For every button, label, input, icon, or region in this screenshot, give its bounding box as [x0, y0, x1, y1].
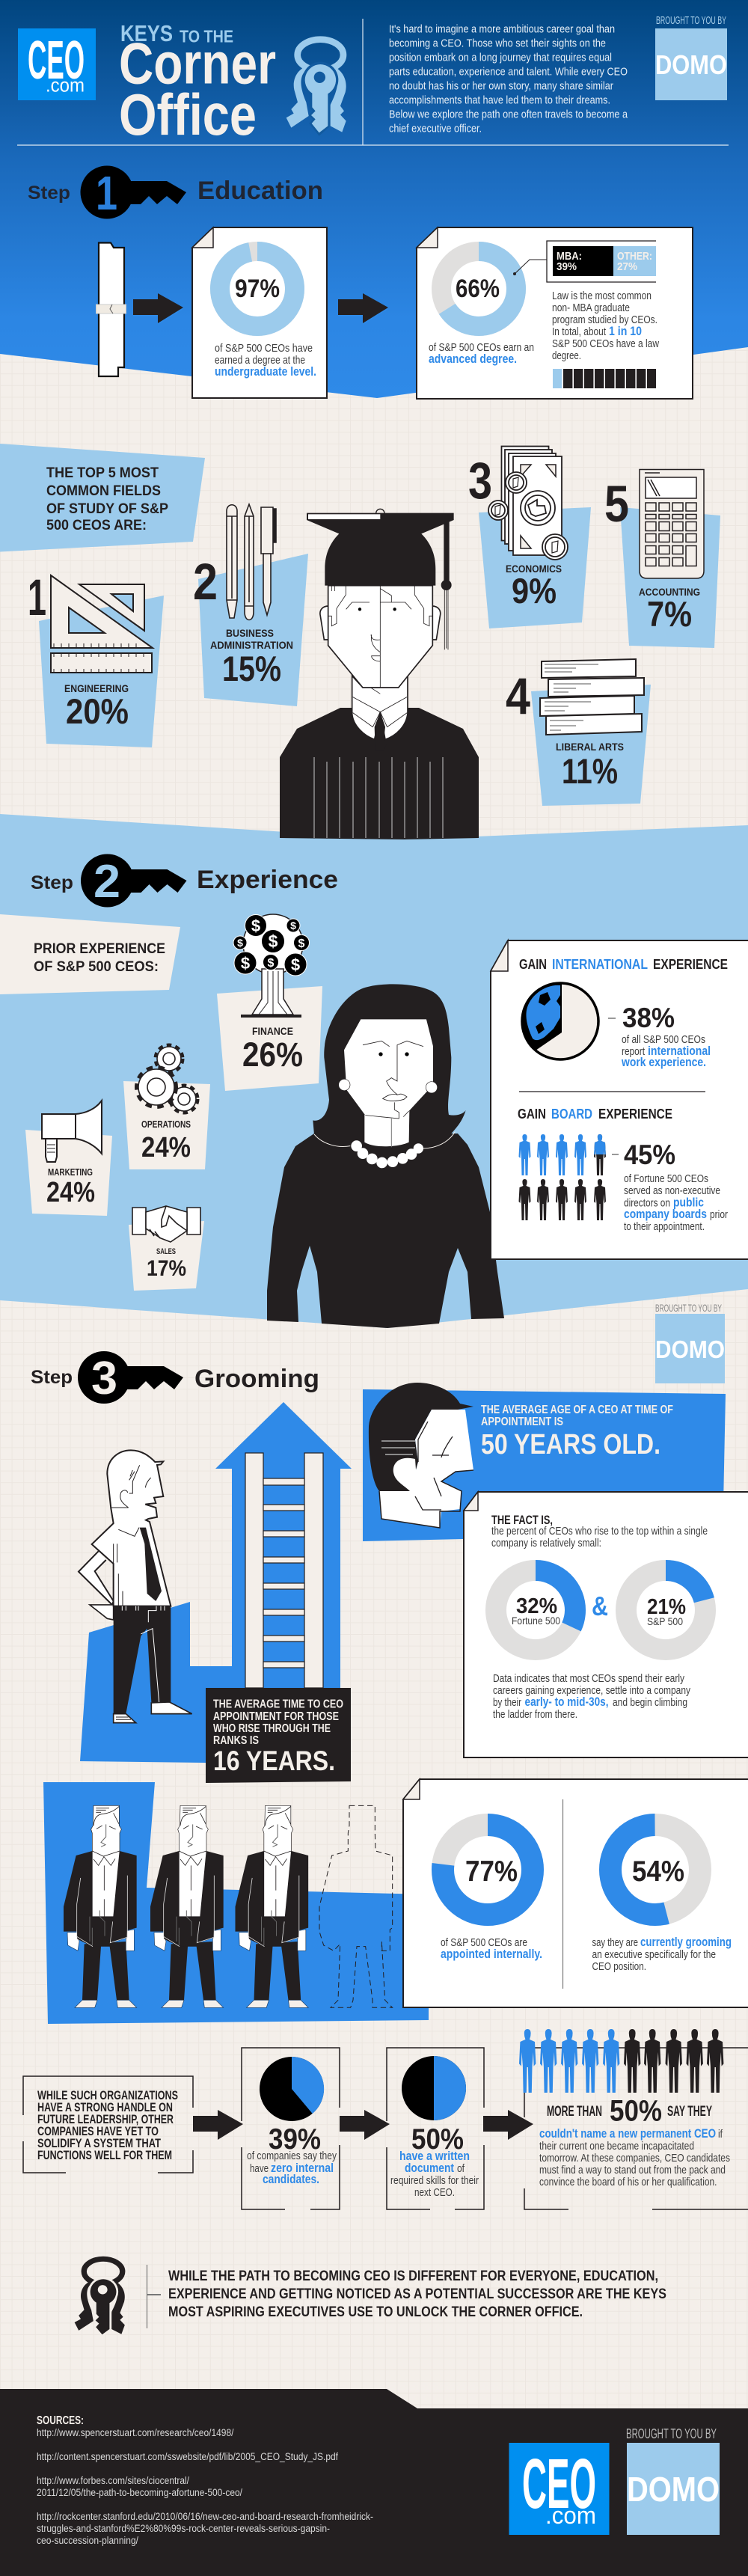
body text: Data indicates that most CEOs spend their early — [493, 1673, 685, 1685]
heading: international — [519, 957, 728, 972]
icon: globe pie 38% — [522, 983, 598, 1059]
panel: business administration 15% — [193, 504, 308, 706]
body text: early- to mid-30s, — [525, 1695, 609, 1709]
caption: undergraduate level. — [215, 364, 316, 379]
stat — [390, 2123, 479, 2199]
arrow — [483, 2110, 533, 2140]
tassel — [444, 520, 450, 581]
sources: http://www.spencerstuart.com/research/ceo/1498/ — [37, 2427, 234, 2438]
panel: liberal arts 11%: LIBERAL ARTS — [556, 741, 624, 753]
stat 38% — [621, 1003, 711, 1069]
panel: top 5 fields intro: THE TOP 5 MOST — [46, 465, 159, 481]
law degree text: 1 in 10 — [609, 324, 642, 338]
icon: megaphone — [42, 1101, 102, 1162]
callout: average time to CEO 16 years: WHO RISE THROUGH THE — [213, 1722, 331, 1735]
heading — [491, 1513, 708, 1549]
donut chart 21%: 21% — [647, 1595, 686, 1619]
body text: their current one became incapacitated — [539, 2140, 694, 2153]
text: APPOINTMENT IS — [481, 1416, 563, 1428]
panel: engineering 20%: 20% — [66, 691, 129, 731]
pictogram: 45 of 100 board members — [519, 1134, 606, 1220]
logo: CEO.com: .com — [545, 2502, 596, 2529]
header and step 1 blue band — [0, 0, 748, 398]
panel: finance 26% — [217, 914, 322, 1091]
icon: money tree: $ — [298, 937, 305, 950]
logo: CEO.com — [18, 28, 96, 100]
panel: engineering 20% — [28, 569, 164, 747]
illustration: successor 1 — [64, 1805, 137, 2007]
donut chart 32%: 32% — [516, 1594, 557, 1618]
stat 45%: 45% — [624, 1139, 675, 1170]
icon: ladder — [245, 1453, 323, 1688]
stat — [247, 2123, 337, 2186]
icon: gears — [138, 1046, 197, 1112]
stat: have — [250, 2162, 269, 2175]
panel: internal appointment and grooming — [403, 1779, 748, 2007]
intro text: parts education, experience and talent. While every CEO — [389, 66, 628, 78]
heading: step 2 experience — [31, 854, 338, 908]
logo: Domo sponsor: DOMO — [655, 1336, 725, 1363]
heading: step 1 education: Education — [197, 177, 323, 205]
logo: Domo: DOMO — [627, 2470, 720, 2509]
law degree text: degree. — [552, 349, 581, 362]
donut chart 32%: Fortune 500 — [512, 1615, 560, 1627]
donut chart 54% — [610, 1825, 700, 1915]
body text — [539, 2126, 730, 2188]
caption: of S&P 500 CEOs earn an — [429, 341, 534, 354]
caption — [592, 1935, 732, 1973]
law degree text — [552, 290, 659, 362]
illustration: woman executive — [267, 984, 504, 1328]
1 in 10 bars — [553, 369, 656, 388]
stat: 39% — [269, 2123, 321, 2156]
heading: step 3 grooming: 3 — [91, 1353, 117, 1404]
panel: liberal arts 11%: 11% — [562, 751, 618, 791]
donut chart 32% — [496, 1570, 575, 1650]
MBA vs other bar: 39% — [557, 260, 577, 273]
stat 38%: international — [648, 1044, 711, 1058]
panel: top 5 fields intro: 500 CEOS ARE: — [46, 518, 147, 533]
callout: average time to CEO 16 years: THE AVERAGE TIME TO CEO — [213, 1698, 343, 1710]
caption: of S&P 500 CEOs are — [441, 1936, 527, 1949]
stat 38%: report — [622, 1045, 646, 1058]
heading: board — [518, 1107, 672, 1122]
donut chart 77% — [443, 1825, 533, 1915]
stat 45% — [624, 1139, 728, 1233]
panel: economics 9% — [468, 446, 591, 628]
sources — [37, 2414, 373, 2546]
panel: engineering 20%: 1 — [28, 569, 46, 626]
law degree text: S&P 500 CEOs have a law — [552, 337, 659, 350]
callout: organizations text frame: FUNCTIONS WELL FOR THEM — [37, 2148, 172, 2162]
callout: organizations text frame: SOLIDIFY A SYSTEM THAT — [37, 2136, 161, 2150]
icon: money tree: $ — [268, 957, 275, 970]
icon: money tree — [233, 914, 310, 1018]
intro text — [389, 24, 628, 135]
stat 45%: served as non-executive — [624, 1184, 720, 1197]
heading: step 1 education — [28, 166, 323, 220]
panel: marketing 24% — [25, 1101, 112, 1216]
panel: sales 17%: 17% — [147, 1256, 186, 1281]
caption: appointed internally. — [441, 1947, 542, 1961]
stat 50%: 50% — [610, 2095, 662, 2128]
sources: SOURCES: — [37, 2414, 84, 2427]
stat: of companies say they — [247, 2150, 337, 2162]
caption: advanced degree. — [429, 352, 517, 366]
panel: prior experience intro: OF S&P 500 CEOS: — [34, 959, 159, 975]
donut chart 66%: 66% — [456, 275, 500, 303]
caption: CEO position. — [592, 1960, 646, 1973]
caption: say they are — [592, 1936, 638, 1949]
panel: accounting 7%: ACCOUNTING — [639, 586, 700, 598]
pictogram: people row — [519, 2029, 723, 2093]
intro text: no doubt has his or her own story, many share similar — [389, 81, 613, 93]
MBA vs other bar: 27% — [617, 260, 637, 273]
heading: step 3 grooming: Step — [31, 1367, 73, 1388]
intro text: becoming a CEO. Those who set their sights on the — [389, 37, 606, 49]
stat 45%: to their appointment. — [624, 1220, 705, 1233]
panel: operations 24% — [123, 1046, 210, 1169]
stat: 50% — [411, 2123, 464, 2156]
donut chart 21%: S&P 500 — [647, 1615, 683, 1627]
stat 50% — [547, 2095, 712, 2128]
stat 45%: prior — [710, 1208, 728, 1221]
heading: board: BOARD — [551, 1107, 592, 1122]
logo: Domo sponsor — [655, 1302, 725, 1383]
sources: 2011/12/05/the-path-to-becoming-afortune-500-ceo/ — [37, 2487, 242, 2498]
face — [344, 1019, 433, 1119]
icon: money stack and coins — [488, 446, 568, 560]
icon: money tree: $ — [269, 931, 278, 951]
donut chart 77%: 77% — [465, 1855, 518, 1888]
illustration: graduate — [280, 509, 479, 839]
callout: average time to CEO 16 years — [206, 1688, 351, 1783]
icon: keys — [286, 40, 346, 136]
illustration: standing man — [79, 1450, 192, 1723]
donut chart 97%: 97% — [235, 275, 280, 303]
MBA vs other bar: MBA: — [557, 250, 582, 263]
blue arrow and step panel — [80, 1402, 352, 1763]
title: KEYS — [120, 20, 173, 46]
tie — [375, 712, 387, 750]
panel: accounting 7% — [604, 470, 720, 648]
panel: economics 9%: 3 — [468, 452, 492, 510]
logo: CEO.com: CEO — [522, 2444, 596, 2524]
icon: money tree: $ — [291, 955, 300, 974]
neck and collar — [352, 676, 408, 739]
callout: organizations text frame — [23, 2076, 193, 2173]
illustration: missing successor dashed outline — [319, 1805, 393, 2007]
law degree text: non- MBA graduate — [552, 302, 630, 314]
heading: international: GAIN — [519, 957, 547, 972]
logo: CEO.com: CEO — [28, 31, 85, 91]
dash — [612, 1154, 619, 1155]
callout: average time to CEO 16 years: 16 YEARS. — [213, 1746, 335, 1776]
arrow — [340, 2110, 390, 2140]
logo: Domo sponsor: DOMO — [655, 49, 727, 80]
stat: have a written — [399, 2149, 470, 2163]
body text — [493, 1673, 691, 1721]
intro text: position embark on a long journey that requires equal — [389, 52, 612, 64]
text: MOST ASPIRING EXECUTIVES USE TO UNLOCK THE CORNER OFFICE. — [168, 2304, 583, 2320]
caption: of S&P 500 CEOs have — [215, 342, 313, 355]
hair — [313, 984, 466, 1145]
panel: liberal arts 11%: 4 — [506, 667, 530, 725]
stat 45%: of Fortune 500 CEOs — [624, 1172, 708, 1185]
stat 38%: of all S&P 500 CEOs — [622, 1033, 705, 1046]
callout: organizations text frame: WHILE SUCH ORGANIZATIONS — [37, 2088, 178, 2102]
stat: candidates. — [263, 2172, 319, 2186]
divider lines — [17, 19, 729, 145]
caption: earned a degree at the — [215, 354, 305, 367]
donut chart 97% — [220, 251, 295, 326]
icon: handshake — [132, 1206, 200, 1242]
stat: next CEO. — [414, 2186, 455, 2199]
panel: economics 9%: 9% — [512, 571, 557, 611]
dash — [608, 1018, 616, 1019]
body text: and begin climbing — [613, 1697, 687, 1709]
panel: liberal arts 11% — [506, 659, 651, 806]
panel: 39% zero internal candidates — [242, 2048, 340, 2209]
conclusion — [75, 2259, 666, 2337]
panel: business administration 15%: ADMINISTRATION — [210, 639, 293, 651]
ears — [320, 606, 441, 640]
heading: THE FACT IS, — [491, 1513, 553, 1527]
heading: step 1 education: 1 — [96, 166, 117, 220]
panel: sales 17% — [129, 1206, 204, 1291]
panel: operations 24%: 24% — [141, 1132, 191, 1163]
title: Corner — [119, 30, 276, 96]
panel: the fact is — [464, 1492, 748, 1757]
arrow — [133, 293, 183, 325]
intro text: It's hard to imagine a more ambitious career goal than — [389, 24, 615, 36]
sources: http://rockcenter.stanford.edu/2010/06/16/new-ceo-and-board-research-fromheidrick- — [37, 2511, 373, 2522]
callout: organizations text frame: FUTURE LEADERSHIP, OTHER — [37, 2112, 174, 2126]
panel: operations 24%: OPERATIONS — [141, 1119, 191, 1130]
panel: blue backdrop for successors — [43, 1782, 429, 2024]
step 2 light blue band — [0, 814, 748, 1328]
heading: step 1 education: Step — [28, 183, 70, 204]
logo: Domo sponsor — [655, 14, 727, 100]
panel: sales 17%: SALES — [156, 1247, 176, 1256]
pie chart 39% — [260, 2057, 324, 2121]
callout: organizations text frame: HAVE A STRONG HANDLE ON — [37, 2100, 173, 2114]
callout: average time to CEO 16 years: APPOINTMENT FOR THOSE — [213, 1710, 339, 1723]
text: EXPERIENCE AND GETTING NOTICED AS A POTENTIAL SUCCESSOR ARE THE KEYS — [168, 2286, 666, 2302]
icon: calculator — [640, 470, 704, 578]
logo: CEO.com: .com — [46, 73, 85, 96]
panel: finance 26%: FINANCE — [252, 1025, 293, 1037]
caption — [215, 342, 316, 379]
panel: marketing 24%: MARKETING — [48, 1166, 93, 1178]
intro text: Below we explore the path one often travels to become a — [389, 109, 628, 121]
heading: step 3 grooming — [31, 1351, 319, 1404]
icon: keys — [75, 2259, 125, 2337]
donut chart 66% — [441, 251, 516, 326]
heading: board: EXPERIENCE — [598, 1107, 672, 1122]
body text: by their — [493, 1697, 521, 1709]
panel: undergraduate degree — [192, 227, 327, 398]
stat 50%: MORE THAN — [547, 2104, 602, 2120]
title: TO THE — [180, 27, 233, 46]
panel: prior experience intro — [0, 914, 180, 994]
law degree text: Law is the most common — [552, 290, 652, 302]
body text: careers gaining experience, settle into a company — [493, 1685, 691, 1697]
necklace — [351, 1140, 423, 1168]
stat 38%: 38% — [622, 1003, 675, 1033]
panel: economics 9%: ECONOMICS — [506, 563, 562, 575]
logo: Domo — [627, 2443, 720, 2535]
icon: money tree: $ — [241, 954, 250, 973]
earrings — [339, 1079, 350, 1091]
panel: advanced degree — [417, 227, 693, 399]
icon: stack of books — [540, 659, 644, 735]
stat 50%: SAY THEY — [667, 2104, 712, 2120]
heading: step 2 experience: Step — [31, 872, 73, 893]
heading: board: GAIN — [518, 1107, 546, 1122]
text — [168, 2268, 666, 2320]
intro text: accomplishments that have led them to their dreams. — [389, 94, 610, 106]
icon: money tree: $ — [251, 917, 260, 935]
text: WHILE THE PATH TO BECOMING CEO IS DIFFERENT FOR EVERYONE, EDUCATION, — [168, 2268, 658, 2284]
stat 45%: company boards — [624, 1207, 707, 1221]
sources: struggles-and-stanford%E2%80%99s-rock-center-reveals-serious-gapsin- — [37, 2523, 330, 2534]
panel: top 5 fields intro: COMMON FIELDS — [46, 483, 161, 499]
footer — [0, 2389, 748, 2576]
caption — [429, 341, 534, 366]
ampersand: & — [592, 1591, 608, 1621]
text: THE AVERAGE AGE OF A CEO AT TIME OF — [481, 1404, 673, 1416]
icon: pens and pencil — [227, 504, 276, 619]
arrow — [193, 2110, 243, 2140]
panel: prior experience intro: PRIOR EXPERIENCE — [34, 941, 165, 957]
panel: top 5 fields intro: OF STUDY OF S&P — [46, 501, 168, 517]
heading: international: INTERNATIONAL — [552, 957, 648, 972]
heading: step 2 experience: Experience — [197, 866, 338, 894]
panel: accounting 7%: 7% — [647, 594, 692, 634]
heading: step 3 grooming: Grooming — [194, 1365, 319, 1393]
panel: couldn't name a new CEO — [519, 2029, 748, 2209]
stat: zero internal — [271, 2161, 334, 2175]
stat 45%: public — [673, 1196, 704, 1209]
body text: if — [718, 2128, 723, 2141]
caption: an executive specifically for the — [592, 1948, 716, 1961]
illustration: man head profile — [369, 1383, 473, 1528]
illustration: successor 2 — [150, 1805, 224, 2007]
callout: organizations text frame: COMPANIES HAVE YET TO — [37, 2124, 159, 2138]
icon: set squares and ruler — [51, 575, 153, 673]
face — [328, 586, 432, 688]
text — [481, 1404, 673, 1460]
caption — [441, 1936, 542, 1961]
icon: diploma scroll — [96, 242, 126, 376]
heading: step 2 experience: 2 — [94, 856, 120, 908]
panel: business administration 15%: 15% — [222, 649, 281, 688]
panel: business administration 15%: 2 — [193, 553, 218, 611]
stat 38%: work experience. — [621, 1055, 706, 1069]
panel: top 5 fields intro — [0, 444, 205, 552]
stat 45%: directors on — [624, 1197, 670, 1209]
panel: international and board experience — [491, 940, 748, 1259]
MBA vs other bar — [513, 241, 656, 282]
panel: business administration 15%: BUSINESS — [226, 627, 274, 639]
callout: average age 50 years — [363, 1383, 726, 1541]
panel: engineering 20%: ENGINEERING — [64, 682, 129, 694]
header — [17, 14, 729, 147]
panel: accounting 7%: 5 — [604, 475, 629, 533]
icon: money tree: $ — [290, 920, 296, 931]
MBA vs other bar: OTHER: — [617, 250, 652, 263]
heading: company is relatively small: — [491, 1538, 601, 1549]
neck — [364, 1111, 409, 1146]
sources: http://www.forbes.com/sites/ciocentral/ — [37, 2475, 189, 2486]
panel: marketing 24%: 24% — [46, 1177, 95, 1208]
heading: international: EXPERIENCE — [653, 957, 728, 972]
body text: the ladder from there. — [493, 1709, 577, 1721]
donut chart 21% — [626, 1570, 705, 1650]
donut chart 54%: 54% — [632, 1855, 684, 1888]
gown — [280, 708, 479, 839]
title: Office — [119, 82, 257, 147]
stat: document — [405, 2161, 454, 2175]
intro text: chief executive officer. — [389, 123, 482, 135]
sources: http://content.spencerstuart.com/sswebsite/pdf/lib/2005_CEO_Study_JS.pdf — [37, 2451, 338, 2462]
dress — [267, 1133, 504, 1328]
law degree text: In total, about — [552, 325, 607, 338]
text: 50 YEARS OLD. — [481, 1429, 660, 1460]
callout: average time to CEO 16 years: RANKS IS — [213, 1734, 259, 1747]
icon: money tree: $ — [237, 937, 243, 949]
law degree text: program studied by CEOs. — [552, 313, 657, 326]
title — [119, 20, 276, 147]
panel: 50% written document — [387, 2048, 484, 2209]
mortarboard — [376, 509, 384, 518]
stat: of — [457, 2162, 465, 2175]
logo: CEO.com — [509, 2443, 609, 2535]
stat: required skills for their — [390, 2174, 479, 2187]
illustration: successor 3 — [235, 1805, 308, 2007]
heading: the percent of CEOs who rise to the top within a single — [491, 1526, 708, 1538]
sources: ceo-succession-planning/ — [37, 2535, 138, 2546]
panel: finance 26%: 26% — [242, 1035, 303, 1074]
pie chart 50% — [402, 2056, 466, 2120]
arrow — [338, 293, 388, 325]
